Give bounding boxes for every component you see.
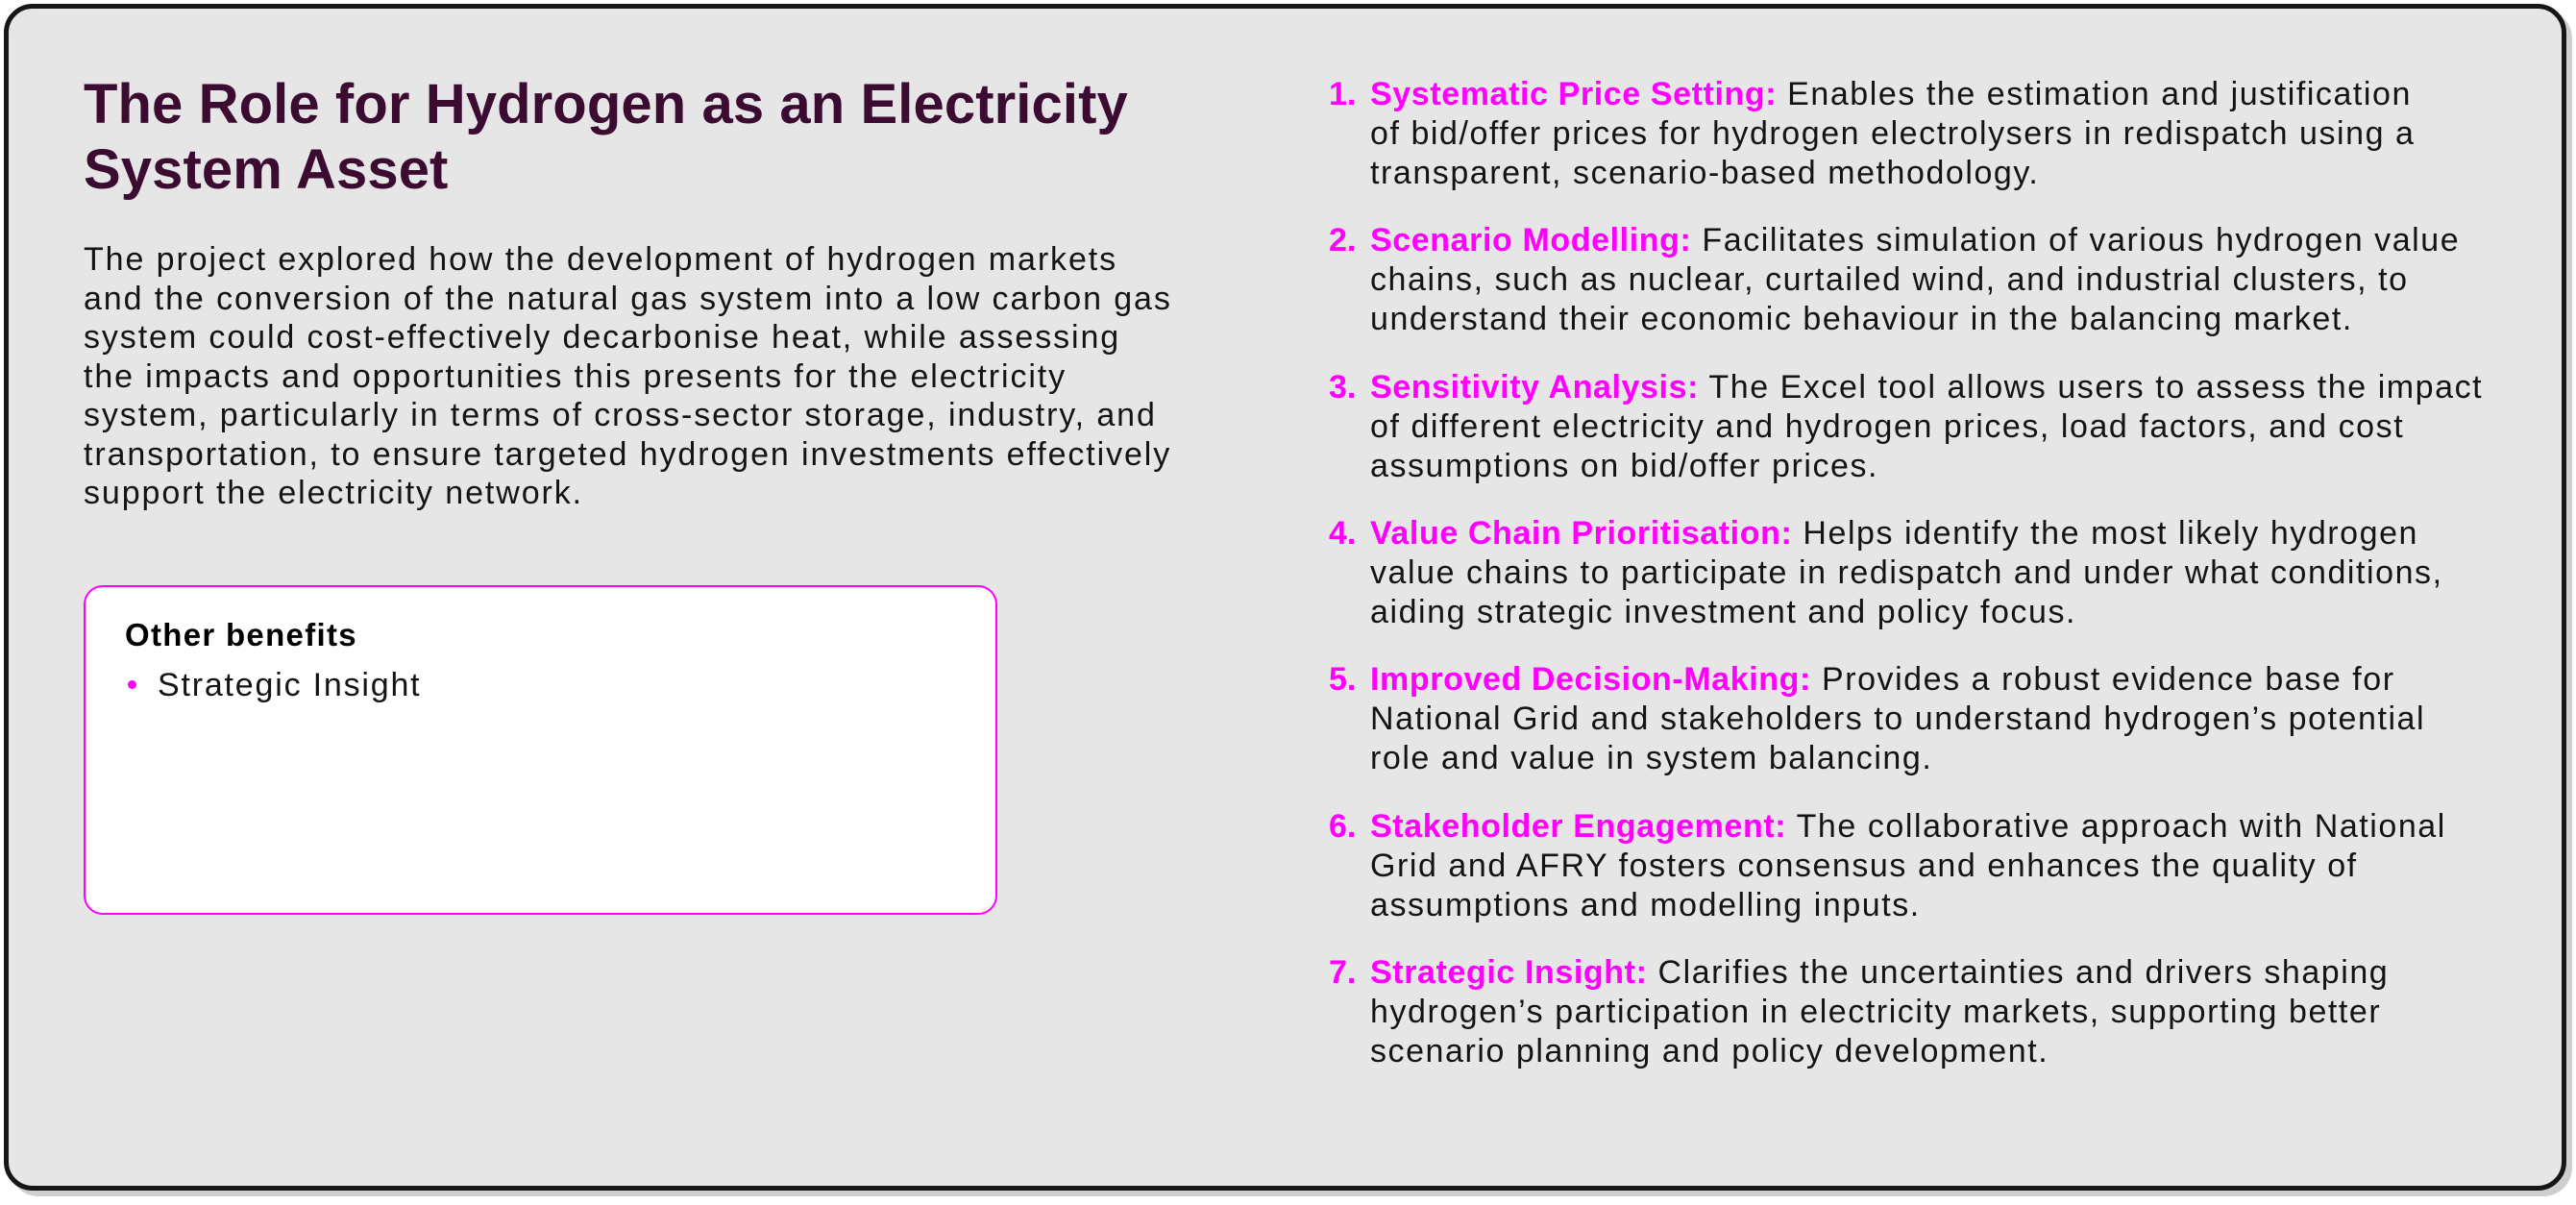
- numbered list: benefits: 7.: [1329, 954, 1356, 991]
- title: [84, 73, 1128, 201]
- numbered list: benefits: Improved Decision-Making: Provides a robust evidence base for: [1370, 661, 2395, 698]
- panel: other benefits: [84, 585, 997, 915]
- numbered list: benefits: role and value in system balancing.: [1370, 740, 1932, 776]
- numbered list: benefits: 3.: [1329, 369, 1356, 406]
- heading: other benefits: Other benefits: [125, 617, 357, 652]
- item 6: [1329, 808, 2446, 923]
- text block: project description: [84, 241, 1172, 511]
- numbered list: benefits: hydrogen’s participation in electricity markets, supporting better: [1370, 994, 2381, 1030]
- numbered list: benefits: [1329, 76, 2483, 1070]
- text block: project description: the impacts and opportunities this presents for the electricity: [84, 357, 1067, 394]
- numbered list: benefits: transparent, scenario-based methodology.: [1370, 155, 2039, 191]
- numbered list: benefits: Systematic Price Setting: Enables the estimation and justification: [1370, 76, 2412, 112]
- numbered list: benefits: 1.: [1329, 76, 1356, 112]
- numbered list: benefits: Strategic Insight: Clarifies the uncertainties and drivers shaping: [1370, 954, 2389, 991]
- bullet item: Strategic Insight: [158, 667, 421, 703]
- item 4: [1329, 515, 2443, 630]
- numbered list: benefits: of different electricity and hydrogen prices, load factors, and cost: [1370, 408, 2404, 445]
- numbered list: benefits: National Grid and stakeholders to understand hydrogen’s potential: [1370, 701, 2425, 737]
- numbered list: benefits: Value Chain Prioritisation: Helps identify the most likely hydrogen: [1370, 515, 2418, 552]
- numbered list: benefits: assumptions on bid/offer prices.: [1370, 448, 1878, 484]
- item 7: [1329, 954, 2389, 1070]
- numbered list: benefits: chains, such as nuclear, curtailed wind, and industrial clusters, to: [1370, 261, 2409, 298]
- numbered list: benefits: Stakeholder Engagement: The collaborative approach with National: [1370, 808, 2446, 845]
- item 3: [1329, 369, 2483, 484]
- numbered list: benefits: 6.: [1329, 808, 1356, 845]
- item 5: [1329, 661, 2425, 776]
- numbered list: benefits: 5.: [1329, 661, 1356, 698]
- text block: project description: system, particularly in terms of cross-sector storage, industry, and: [84, 397, 1157, 433]
- numbered list: benefits: scenario planning and policy development.: [1370, 1033, 2049, 1070]
- item 2: [1329, 222, 2460, 337]
- numbered list: benefits: of bid/offer prices for hydrogen electrolysers in redispatch using a: [1370, 115, 2416, 152]
- numbered list: benefits: Grid and AFRY fosters consensus and enhances the quality of: [1370, 848, 2358, 884]
- numbered list: benefits: assumptions and modelling inputs.: [1370, 887, 1921, 923]
- title: The Role for Hydrogen as an Electricity: [84, 73, 1128, 135]
- title: System Asset: [84, 138, 448, 201]
- numbered list: benefits: understand their economic behaviour in the balancing market.: [1370, 301, 2353, 337]
- text block: project description: transportation, to ensure targeted hydrogen investments effectively: [84, 436, 1171, 473]
- text block: project description: and the conversion of the natural gas system into a low carbon gas: [84, 281, 1172, 317]
- numbered list: benefits: Scenario Modelling: Facilitates simulation of various hydrogen value: [1370, 222, 2460, 258]
- numbered list: benefits: 2.: [1329, 222, 1356, 258]
- text block: project description: system could cost-effectively decarbonise heat, while assessing: [84, 319, 1120, 356]
- numbered list: benefits: aiding strategic investment and policy focus.: [1370, 594, 2076, 630]
- text block: project description: support the electricity network.: [84, 475, 583, 511]
- text block: project description: The project explored how the development of hydrogen markets: [84, 241, 1117, 278]
- item 1: [1329, 76, 2416, 191]
- numbered list: benefits: value chains to participate in redispatch and under what conditions,: [1370, 554, 2443, 591]
- numbered list: benefits: Sensitivity Analysis: The Excel tool allows users to assess the impact: [1370, 369, 2483, 406]
- numbered list: benefits: 4.: [1329, 515, 1356, 552]
